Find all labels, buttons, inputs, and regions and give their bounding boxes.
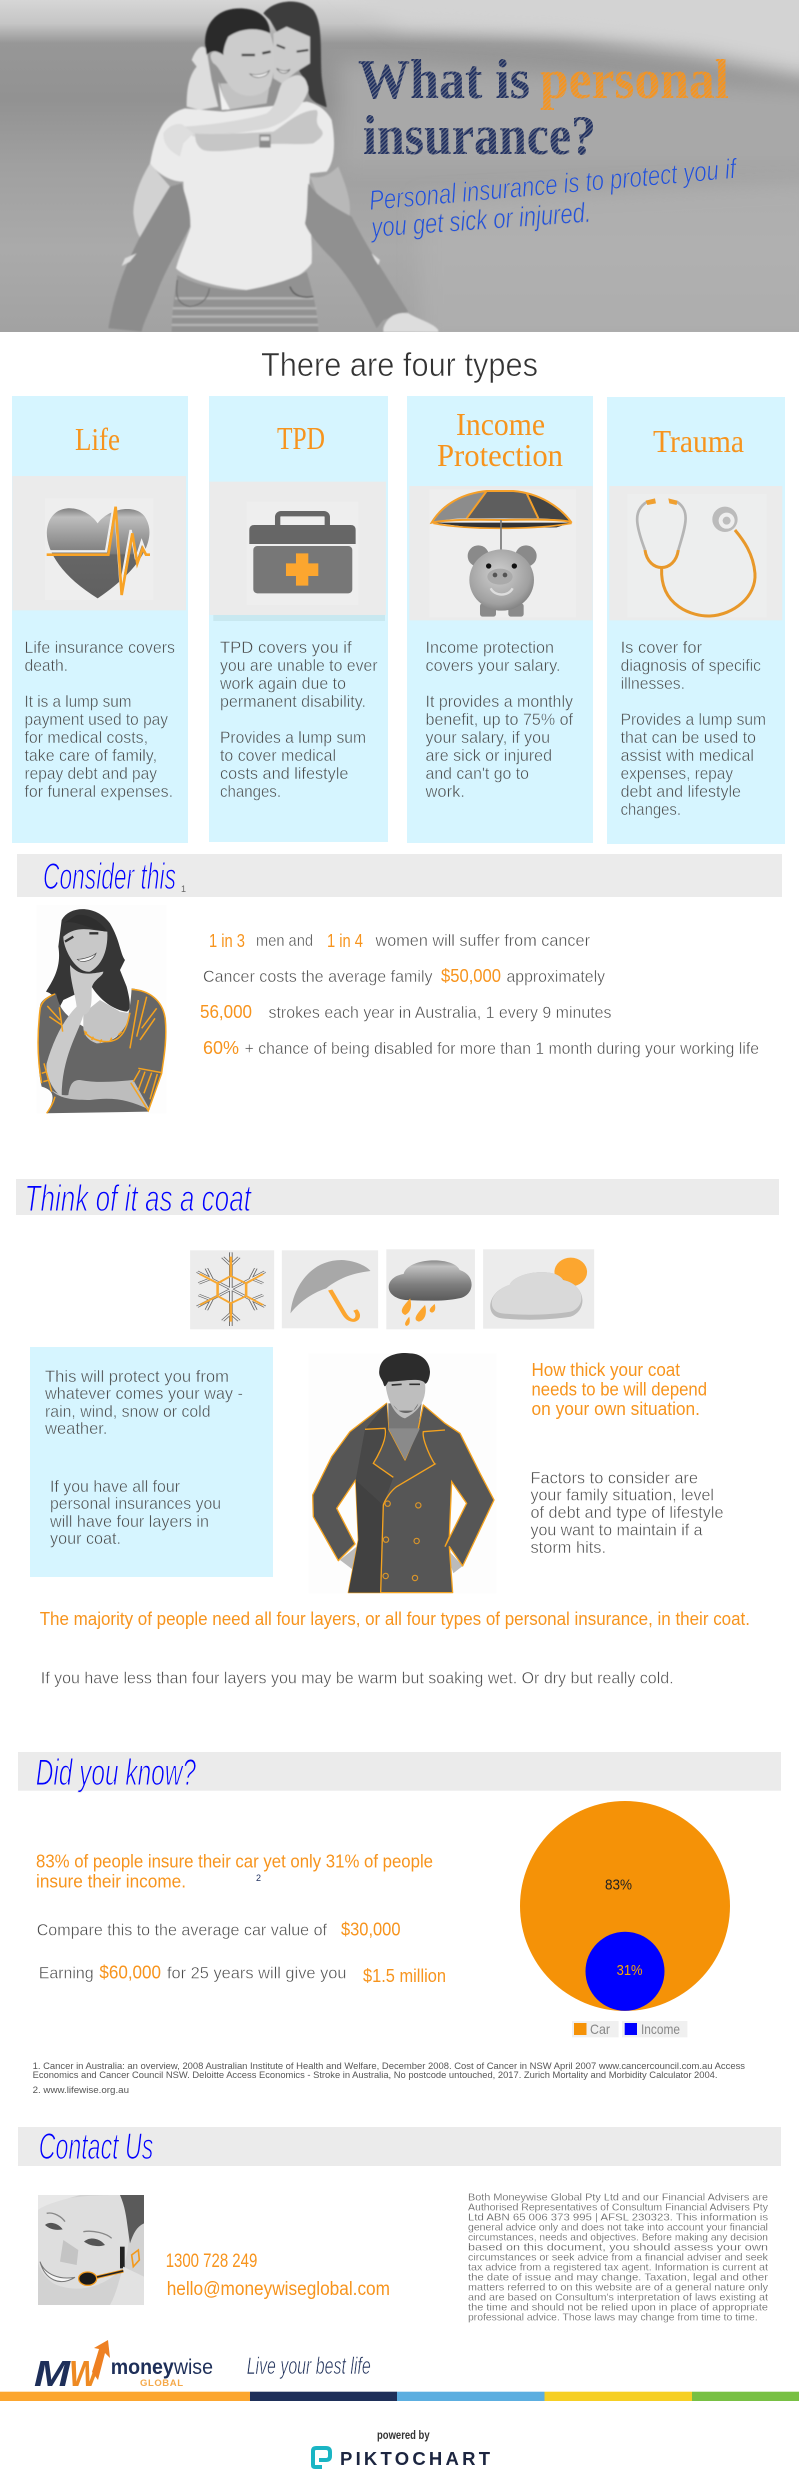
chart legend: Car [590,2021,610,2037]
card text: costs and lifestyle [220,764,348,783]
powered by piktochart [313,2428,491,2469]
stat: cancer odds: 1 in 3 [209,931,245,951]
stat: strokes: 56,000 [200,1002,252,1022]
card text: to cover medical [220,746,336,765]
card background [607,397,785,844]
stat: cancer odds: men and [256,931,313,950]
disclaimer: Ltd ABN 65 006 373 995 | AFSL 230323. This information is [468,2212,768,2224]
card text: that can be used to [621,728,756,747]
icon: umbrella [282,1250,378,1328]
text: insurance comparison: 83% of people insure their car yet only 31% of people [36,1852,433,1872]
logo: moneywise global: moneywise [111,2356,213,2379]
card text: expenses, repay [621,764,733,783]
contact details: hello@moneywiseglobal.com [167,2279,390,2300]
stat: cancer cost: $50,000 [441,966,501,986]
section header bar [18,2127,781,2166]
card text: diagnosis of specific [621,656,761,675]
text: how thick your coat: on your own situation. [532,1399,700,1419]
disclaimer: circumstances or seek advice from a financial adviser and seek [468,2252,769,2264]
panel: TPD [209,396,388,842]
stat: cancer cost: approximately [506,967,605,986]
card text [24,638,175,801]
text: insurance comparison: 2 [256,1873,261,1883]
disclaimer: general advice only and does not take into account your financial [468,2222,768,2234]
disclaimer: Authorised Representatives of Consultum Financial Advisers Pty [468,2202,769,2214]
stat: strokes: strokes each year in Australia, 1 every 9 minutes [268,1003,612,1022]
callout: protection text: weather. [44,1419,108,1438]
panel: Trauma [607,397,785,844]
callout: protection text: your coat. [50,1529,121,1548]
logo: moneywise global: M [34,2353,71,2394]
stat: cancer cost [203,966,605,986]
chart legend: Income [641,2021,680,2037]
card text: Provides a lump sum [220,728,366,747]
text: factors to consider: storm hits. [530,1538,606,1557]
callout: protection text: personal insurances you [50,1494,221,1513]
icon: first aid kit [209,482,386,621]
disclaimer: professional advice. Those laws may change from time to time. [468,2312,758,2324]
card text: It is a lump sum [24,692,132,711]
footnotes: Economics and Cancer Council NSW. Deloitte Access Economics - Stroke in Australia, No postcode untouched, 2017. Zurich Mortality and Morbidity Calculator 2004. [33,2070,718,2081]
logo: moneywise global: GLOBAL [140,2378,183,2389]
card text: death. [24,656,68,675]
panel: Income Protection [407,396,593,843]
card text: benefit, up to 75% of [426,710,573,729]
card text: Income protection [426,638,554,657]
icon: snowflake [190,1250,274,1329]
card text: covers your salary. [426,656,560,675]
callout: protection text [30,1347,273,1577]
stat: cancer cost: Cancer costs the average family [203,967,433,986]
text: earnings: $1.5 million [363,1966,446,1986]
panel: Think of it as a coat [16,1178,779,1688]
hero photo background: grass field [0,0,799,345]
hero photo: couple piggyback [108,2,438,332]
title: What is personal insurance?: personal [540,49,729,111]
section heading: Contact Us [39,2126,153,2167]
title: What is personal insurance?: insurance? [363,105,596,167]
stat: disability: + chance of being disabled for more than 1 month during your working life [245,1039,759,1058]
card title: TPD [277,420,325,456]
card text: debt and lifestyle [621,782,741,801]
card text: work. [425,782,465,801]
text: factors to consider: of debt and type of lifestyle [530,1503,724,1522]
illustration: thinking woman [37,905,167,1113]
panel: Consider this [17,854,782,1113]
callout: protection text: If you have all four [50,1477,180,1496]
disclaimer [468,2192,769,2324]
heading: There are four types: There are four types [261,346,538,383]
chart: car vs income insurance: 31% [617,1962,643,1979]
card background [12,396,188,843]
card text: repay debt and pay [24,764,157,783]
card text: TPD covers you if [220,638,352,657]
text: earnings [39,1963,446,1986]
text: factors to consider: your family situation, level [530,1486,714,1505]
title: What is personal insurance? [358,59,728,155]
card title: Life [75,421,120,457]
tagline: Live your best life: Live your best life [247,2353,371,2380]
text: earnings: for 25 years will give you [167,1964,346,1983]
section header bar [17,854,782,897]
stat: disability: 60% [203,1038,239,1058]
card text: are sick or injured [426,746,552,765]
card text: payment used to pay [24,710,168,729]
card text: changes. [621,800,681,819]
footnotes: 1. Cancer in Australia: an overview, 2008 Australian Institute of Health and Welfare, December 2008. Cost of Cancer in NSW April 2007 www.cancercouncil.com.au Access [33,2061,745,2072]
section heading: Consider this [43,856,176,897]
card text: It provides a monthly [426,692,573,711]
text: car value: $30,000 [341,1919,400,1939]
chart: car vs income insurance [520,1801,730,2037]
text: earnings: Earning [39,1964,94,1983]
panel: Life [12,396,188,843]
disclaimer: the time and should not be relied upon in place of appropriate [468,2302,768,2314]
disclaimer: circumstances, needs and objectives. Before making any decision [468,2232,768,2244]
card text: your salary, if you [426,728,550,747]
section heading: Think of it as a coat [24,1178,252,1219]
card text: and can't go to [426,764,529,783]
icon: piktochart logo [313,2448,330,2467]
chart: car vs income insurance: 83% [605,1877,632,1894]
powered by piktochart: powered by [377,2428,430,2442]
subtitle: you get sick or injured. [369,197,592,243]
card text: changes. [220,782,281,801]
card text: permanent disability. [220,692,366,711]
logo: moneywise global: W [69,2353,102,2394]
icon: sun behind cloud [483,1249,594,1329]
card title [437,406,563,473]
icon: heart with pulse [12,476,186,610]
card text: illnesses. [621,674,685,693]
text: how thick your coat: How thick your coat [532,1360,680,1380]
panel: Contact Us [18,2126,781,2394]
text: factors to consider: Factors to consider are [530,1468,698,1487]
powered by piktochart: PIKTOCHART [340,2448,491,2469]
text: factors to consider: you want to maintain if a [530,1521,703,1540]
chart legend [572,2021,687,2037]
text: earnings: $60,000 [99,1963,161,1983]
text: how thick your coat: needs to be will depend [532,1380,707,1400]
callout: protection text: This will protect you from [45,1367,229,1386]
disclaimer: matters referred to on this website are of a general nature only [468,2282,769,2294]
card text [425,638,573,801]
card text [621,638,766,819]
card background [209,396,388,842]
card text: for funeral expenses. [24,782,173,801]
card text: you are unable to ever [220,656,378,675]
illustration: man in coat [308,1353,497,1593]
text: insurance comparison: insure their income. [36,1872,186,1892]
statistics list [200,931,759,1058]
section heading: Did you know? [36,1752,196,1793]
footnotes [33,2061,745,2096]
card text: assist with medical [621,746,754,765]
disclaimer: the date of issue and may change. Taxation, legal and other [468,2272,769,2284]
stat: cancer odds [209,931,590,951]
card text: Provides a lump sum [621,710,766,729]
title: What is personal insurance?: What is [358,49,530,111]
subtitle [368,153,740,243]
card title: Income [456,406,545,442]
disclaimer: based on this document, you should assess your own [468,2242,768,2254]
weather icons row [190,1249,594,1329]
contact details [166,2251,390,2300]
text: majority need all four layers: The majority of people need all four layers, or all four types of personal insurance, in their coat. [40,1609,750,1629]
icon: piggy bank under umbrella [409,486,593,620]
footnotes: 2. www.lifewise.org.au [33,2085,129,2096]
card text [219,638,378,801]
section header bar [18,1752,781,1791]
icon: stethoscope [609,486,782,620]
contact details: 1300 728 249 [166,2251,257,2272]
disclaimer: Both Moneywise Global Pty Ltd and our Financial Advisers are [468,2192,768,2204]
stat: cancer odds: 1 in 4 [327,931,363,951]
section header bar [16,1179,779,1215]
card text: take care of family, [24,746,157,765]
card background [407,396,593,843]
card text: for medical costs, [24,728,148,747]
card title: Protection [437,437,563,473]
stat: cancer odds: women will suffer from cancer [375,931,590,950]
footnote marker 1: 1 [181,884,186,894]
hero banner [0,0,799,345]
callout: protection text: rain, wind, snow or cold [45,1402,210,1421]
colour band [0,2392,799,2401]
text: how thick your coat [532,1360,707,1419]
card text: Is cover for [621,638,702,657]
panel: Did you know? [18,1752,781,2096]
card title: Trauma [653,423,744,459]
card text: Life insurance covers [24,638,175,657]
card text: work again due to [219,674,346,693]
disclaimer: tax advice from a registered tax agent. Information is current at [468,2262,768,2274]
disclaimer: and are based on Consultum's interpretation of laws existing at [468,2292,768,2304]
logo: moneywise global [34,2340,213,2394]
text: insurance comparison [36,1852,433,1892]
icon: rain cloud [386,1249,475,1329]
text: factors to consider [530,1468,724,1557]
text: less than four layers: If you have less than four layers you may be warm but soaking wet. Or dry but really cold. [41,1669,674,1688]
callout: protection text: whatever comes your way - [44,1384,243,1403]
text: car value: Compare this to the average car value of [37,1920,327,1939]
photo: call centre woman with headset [38,2195,144,2305]
callout: protection text: will have four layers in [49,1512,209,1531]
